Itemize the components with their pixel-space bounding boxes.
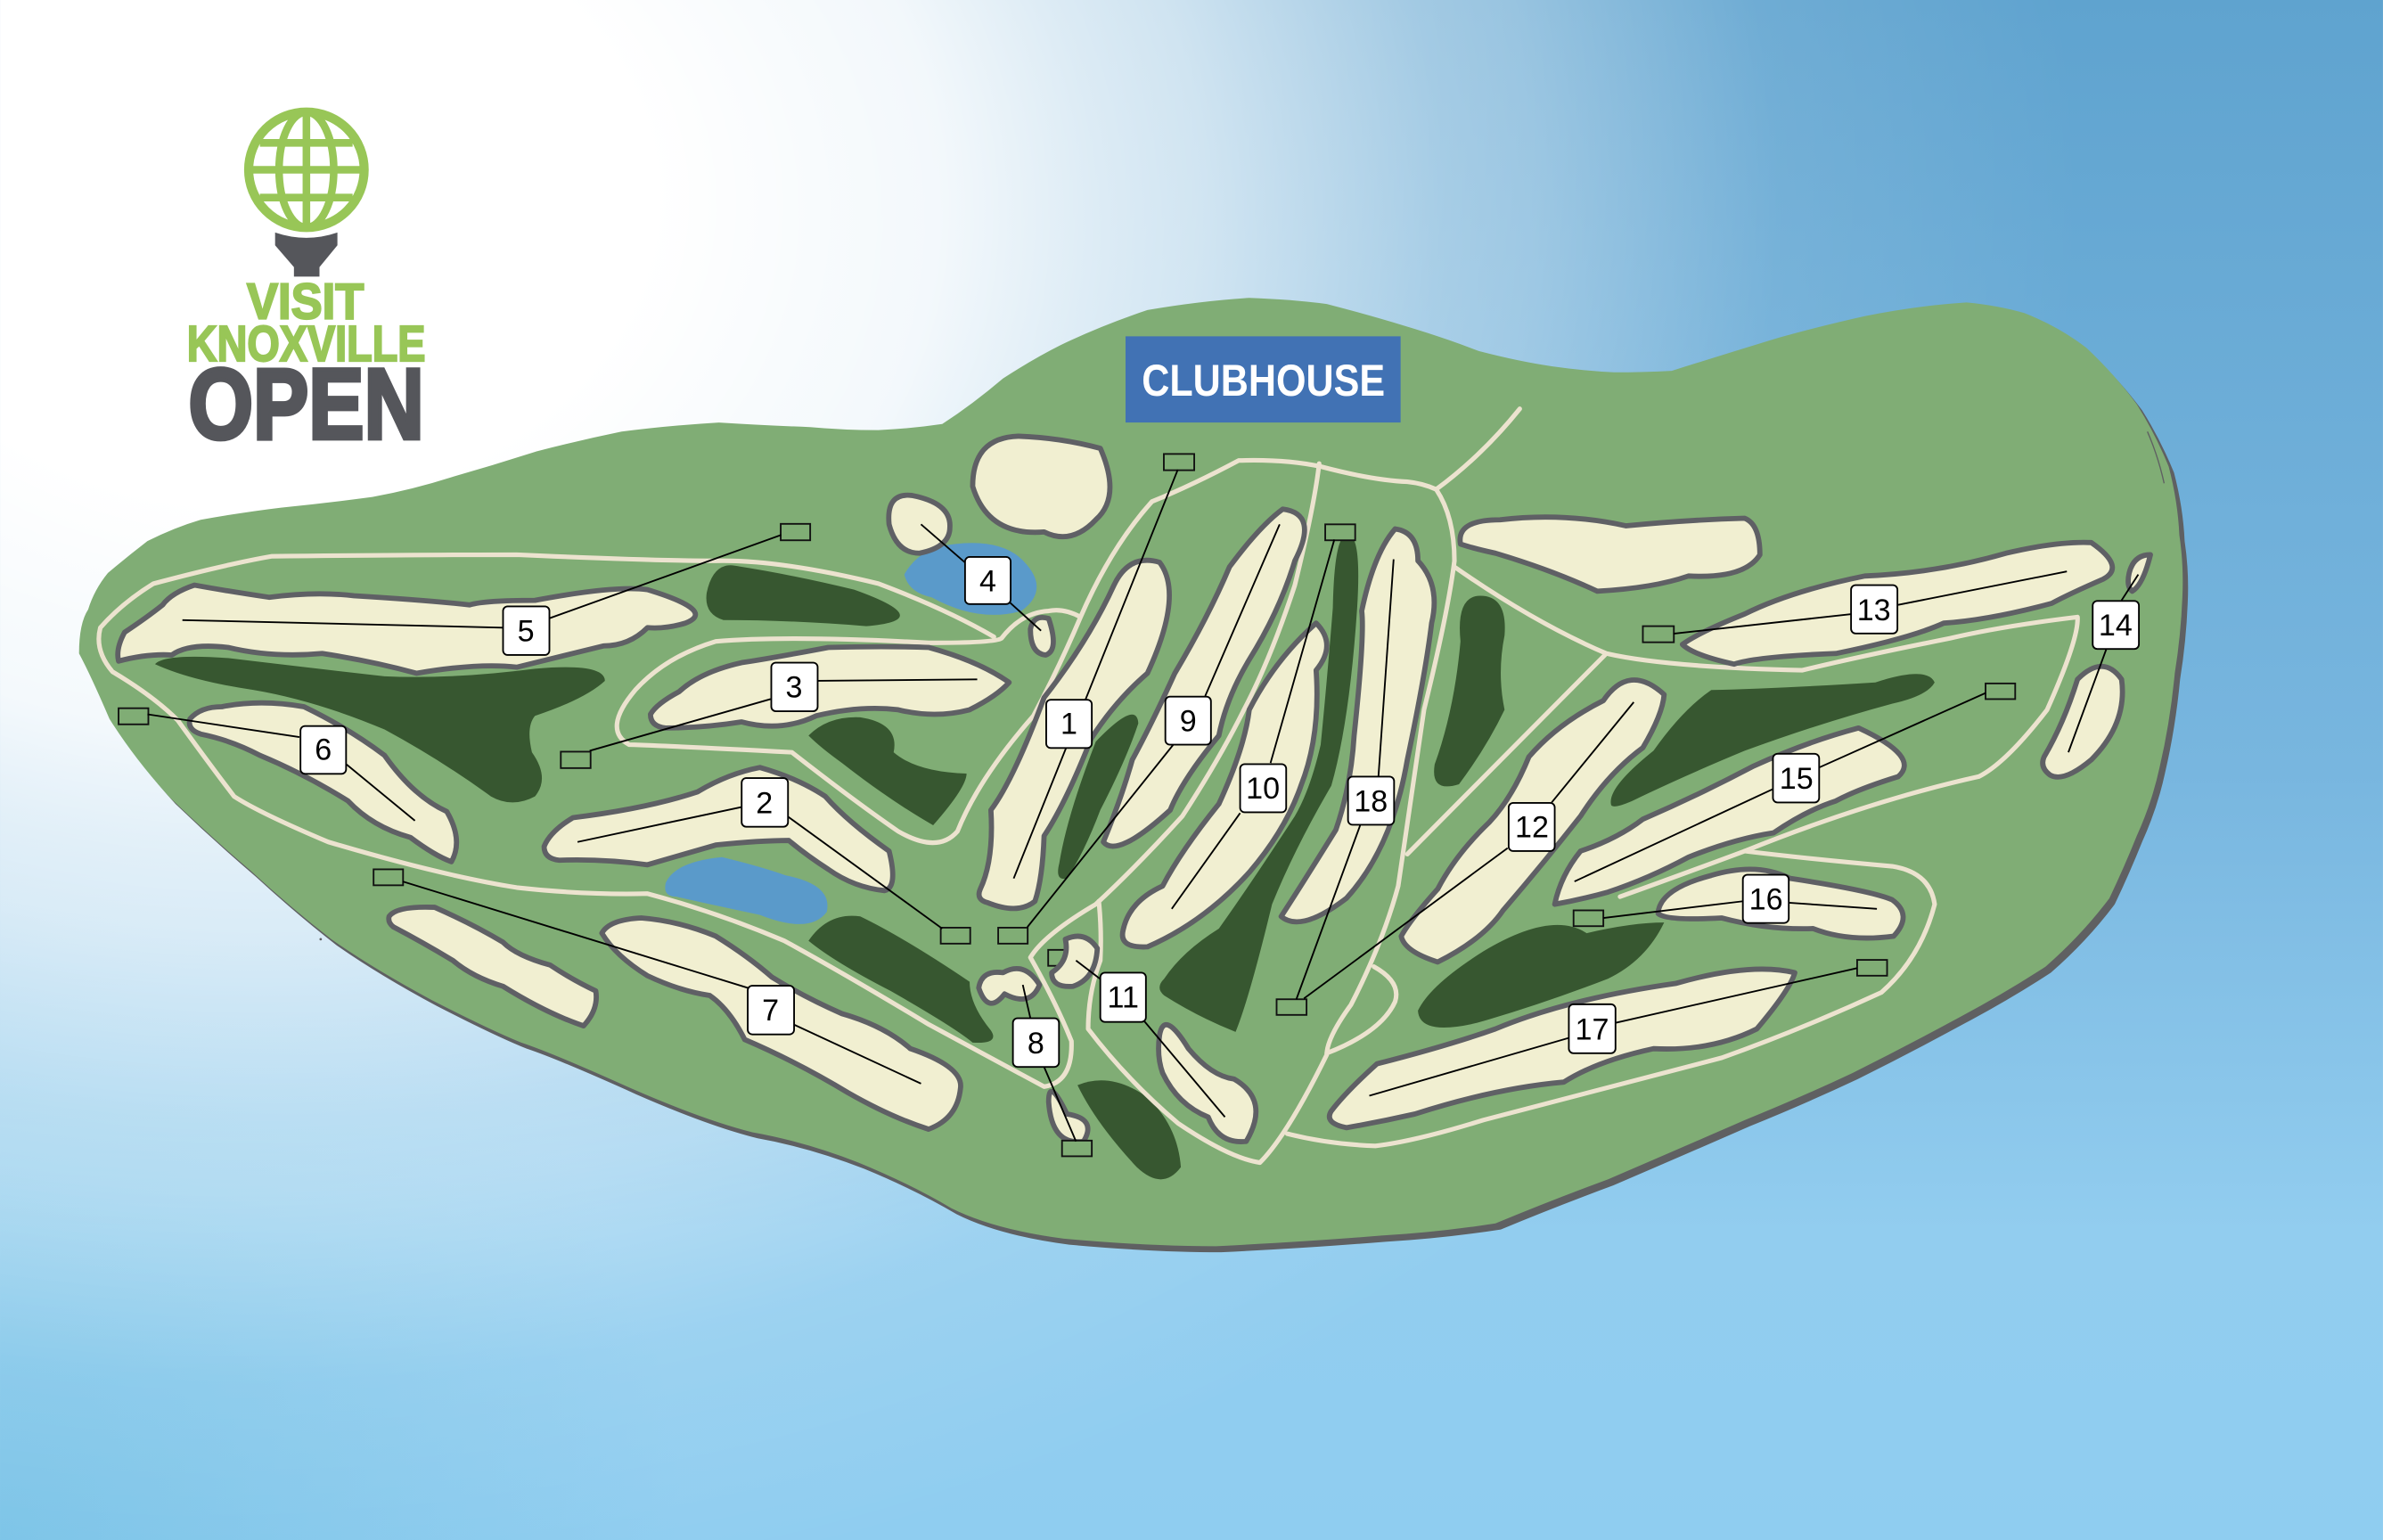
label 16: 16 bbox=[1749, 883, 1783, 917]
label 18 bbox=[1348, 776, 1394, 824]
fairway: hole 2 bbox=[545, 767, 893, 890]
label 4: 4 bbox=[979, 564, 996, 598]
fairway: hole 17 bbox=[1330, 969, 1795, 1127]
label 4 bbox=[965, 557, 1011, 604]
course ground with shadow edge bbox=[79, 298, 2188, 1252]
label 15 bbox=[1773, 754, 1819, 802]
label 5 bbox=[503, 606, 550, 655]
practice area bbox=[972, 436, 1110, 537]
fairway: hole 9 bbox=[1103, 509, 1305, 847]
fairway: hole 7 bbox=[602, 918, 961, 1129]
green: hole 4 tee area bbox=[889, 496, 950, 553]
label 11 bbox=[1101, 972, 1146, 1022]
green: hole 14 bbox=[2128, 554, 2150, 591]
icon: globe golf ball bbox=[249, 112, 364, 228]
label 14 bbox=[2092, 601, 2139, 649]
label 8: 8 bbox=[1028, 1027, 1044, 1061]
label 3 bbox=[771, 663, 817, 711]
fairway: hole 13 bbox=[1683, 543, 2112, 664]
fairway: unnumbered left bbox=[389, 907, 596, 1026]
label 18: 18 bbox=[1354, 785, 1388, 819]
label 1 bbox=[1046, 700, 1092, 748]
fairway: hole 18 bbox=[1282, 528, 1434, 922]
label 3: 3 bbox=[786, 671, 803, 705]
fairway: hole 3 bbox=[651, 647, 1009, 728]
label 6 bbox=[300, 726, 346, 774]
label 11: 11 bbox=[1108, 981, 1139, 1015]
water hazards bbox=[665, 543, 1036, 924]
label 10: 10 bbox=[1246, 772, 1280, 806]
label 15: 15 bbox=[1780, 762, 1814, 796]
fairway: hole 12 bbox=[1401, 680, 1664, 962]
fairway: hole 16 bbox=[1658, 869, 1904, 938]
label 1: 1 bbox=[1060, 708, 1077, 741]
label 12: 12 bbox=[1515, 811, 1549, 845]
fairway: hole 6 bbox=[190, 703, 456, 862]
label 2 bbox=[741, 778, 788, 827]
clubhouse sign bbox=[1126, 336, 1401, 422]
label 2: 2 bbox=[756, 786, 773, 820]
fairway: hole 10 bbox=[1123, 623, 1327, 947]
fairways and greens bbox=[118, 436, 2150, 1142]
label 7 bbox=[748, 986, 794, 1035]
logo text: VISIT: VISIT bbox=[247, 273, 364, 329]
hole number labels bbox=[300, 557, 2139, 1067]
label 9: 9 bbox=[1180, 704, 1197, 738]
label 5: 5 bbox=[518, 615, 535, 649]
label 17 bbox=[1568, 1004, 1616, 1053]
label 16 bbox=[1743, 875, 1789, 923]
fairway: unnumbered upper right bbox=[1460, 517, 1760, 591]
green: hole 8 lower bbox=[1049, 1092, 1088, 1142]
label 14: 14 bbox=[2099, 609, 2133, 643]
hole leader lines bbox=[147, 470, 2138, 1142]
label 12 bbox=[1509, 803, 1555, 851]
green: hole 4 bbox=[1030, 618, 1053, 655]
fairway: hole 5 bbox=[118, 586, 695, 673]
logo text: OPEN: OPEN bbox=[188, 348, 424, 460]
green: hole 11 bbox=[1052, 936, 1097, 987]
fairway: hole 1 bbox=[979, 561, 1169, 908]
label 13: 13 bbox=[1857, 594, 1891, 627]
tee box: hole 11 bbox=[1048, 950, 1077, 966]
fairway: hole 14 bbox=[2043, 667, 2123, 777]
label 8 bbox=[1013, 1019, 1059, 1067]
label 9 bbox=[1166, 697, 1211, 745]
label 13 bbox=[1851, 586, 1897, 634]
tee boxes bbox=[119, 454, 2015, 1156]
icon: golf tee bbox=[275, 233, 338, 276]
label 7: 7 bbox=[762, 994, 779, 1028]
label 10 bbox=[1241, 764, 1286, 812]
label 17: 17 bbox=[1576, 1012, 1609, 1046]
clubhouse sign: CLUBHOUSE bbox=[1142, 355, 1385, 405]
fairway: hole 15 bbox=[1555, 728, 1904, 905]
logo: Visit Knoxville Open bbox=[187, 112, 426, 460]
logo text: KNOXVILLE: KNOXVILLE bbox=[187, 315, 426, 372]
fairway: hole 11 bbox=[1159, 1025, 1256, 1142]
cart paths bbox=[99, 409, 2077, 1163]
green: hole 8 upper bbox=[979, 969, 1039, 1003]
label 6: 6 bbox=[315, 733, 332, 767]
tree areas bbox=[155, 535, 1935, 1179]
